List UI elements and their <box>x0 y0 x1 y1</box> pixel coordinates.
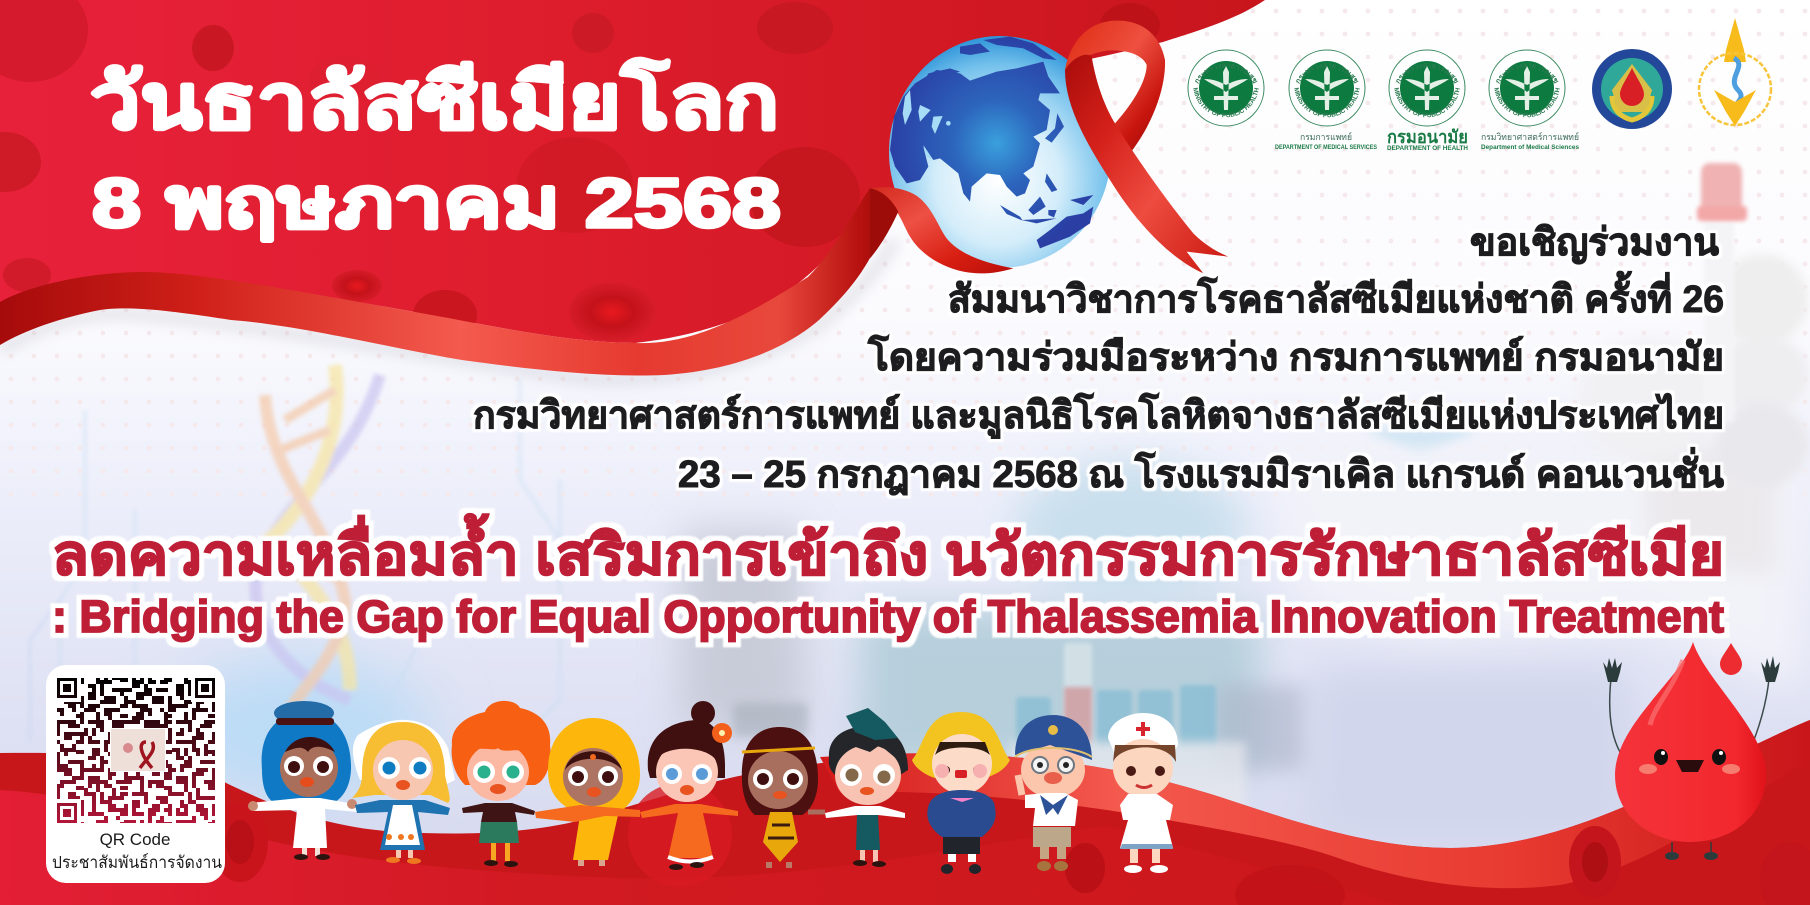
child: blue headdress <box>248 701 360 860</box>
red headline: ลดความเหลื่อมล้ำ เสริมการเข้าถึง นวัตกรรมการรักษาธาลัสซีเมีย <box>52 514 1724 586</box>
child: student with yellow hat <box>912 712 1010 874</box>
logo captions <box>1275 127 1579 152</box>
page title: 8 พฤษภาคม 2568 <box>92 164 781 242</box>
page title: วันธาลัสซีเมียโลก <box>90 57 779 145</box>
wave: front bright red <box>0 790 1400 905</box>
page title <box>90 57 781 242</box>
logo captions: DEPARTMENT OF HEALTH <box>1387 145 1468 152</box>
ribbon front strand and tail <box>1065 55 1228 273</box>
ribbon under globe <box>870 187 1013 273</box>
mascot face <box>1639 749 1740 774</box>
logo: department of health: MINISTRY OF PUBLIC HEALTH <box>1394 88 1460 118</box>
QR caption: ประชาสัมพันธ์การจัดงาน <box>52 853 222 872</box>
logo: department of medical sciences <box>1488 50 1566 126</box>
QR code card <box>46 665 225 883</box>
globe with world map <box>889 36 1111 268</box>
logo captions: Department of Medical Sciences <box>1481 144 1579 151</box>
logo: department of medical services <box>1288 50 1366 126</box>
logo: royal emblem <box>1699 18 1771 126</box>
ribbon back strand <box>1065 21 1165 153</box>
ribbon shadow <box>0 240 895 379</box>
QR caption <box>52 830 222 872</box>
invitation text block: กรมวิทยาศาสตร์การแพทย์ และมูลนิธิโรคโลหิตจางธาลัสซีเมียแห่งประเทศไทย <box>473 392 1724 439</box>
logo: department of medical sciences: กระทรวงสาธารณสุข <box>1496 63 1558 84</box>
swoosh ribbon <box>0 188 885 376</box>
logo captions: กรมการแพทย์ <box>1300 131 1352 142</box>
logo: ministry of public health: กระทรวงสาธารณสุข <box>1195 63 1258 84</box>
QR code <box>57 678 215 823</box>
wave: dark red band <box>0 720 1810 905</box>
blurred laboratory photo <box>170 163 1808 840</box>
invitation text block: โดยความร่วมมือระหว่าง กรมการแพทย์ กรมอนามัย <box>867 334 1724 379</box>
invitation text block <box>473 222 1724 496</box>
child: boy scout <box>1015 715 1092 871</box>
invitation text block: ขอเชิญร่วมงาน <box>1470 222 1719 264</box>
invitation text block: 23 – 25 กรกฎาคม 2568 ณ โรงแรมมิราเคิล แกรนด์ คอนเวนชั่น <box>678 447 1724 496</box>
partner logos <box>1188 18 1772 152</box>
logo: thalassemia foundation <box>1592 49 1672 129</box>
child: hat boy <box>825 708 908 867</box>
mascot hands <box>1603 656 1780 682</box>
blood cells on bottom wave <box>212 783 1810 905</box>
child: blonde dutch girl <box>352 720 455 864</box>
inland seas <box>903 90 951 160</box>
child: yellow sari <box>535 718 640 866</box>
children holding hands <box>248 701 1178 874</box>
logo captions: DEPARTMENT OF MEDICAL SERVICES <box>1275 144 1378 151</box>
top red shape <box>0 0 1265 343</box>
continents <box>890 37 1093 248</box>
child: nurse <box>1108 713 1178 873</box>
logo: ministry of public health: MINISTRY OF PUBLIC HEALTH <box>1193 88 1259 118</box>
logo: department of medical services: กระทรวงสาธารณสุข <box>1296 63 1358 84</box>
logo: department of health: กระทรวงสาธารณสุข <box>1396 63 1458 84</box>
logo: department of medical sciences: MINISTRY OF PUBLIC HEALTH <box>1494 88 1560 118</box>
logo: department of medical services: MINISTRY OF PUBLIC HEALTH <box>1294 88 1360 118</box>
red headline <box>52 514 1724 642</box>
QR caption: QR Code <box>100 830 170 849</box>
wave: salmon highlight ribbon <box>820 720 1810 888</box>
logo: department of health <box>1388 50 1466 126</box>
child: tribal girl <box>742 727 825 868</box>
invitation text block: สัมมนาวิชาการโรคธาลัสซีเมียแห่งชาติ ครั้งที่ 26 <box>948 271 1724 321</box>
red awareness ribbon <box>870 21 1228 273</box>
red blood cells on top shape <box>0 0 1160 341</box>
logo captions: กรมวิทยาศาสตร์การแพทย์ <box>1481 131 1579 142</box>
child: orange curly hair <box>452 701 550 867</box>
child: flower girl <box>640 701 738 870</box>
blood drop mascot <box>1603 642 1780 860</box>
DNA and circuit decoration <box>30 365 560 800</box>
logo: ministry of public health <box>1188 50 1264 126</box>
bottom red waves <box>0 720 1810 905</box>
red headline: : Bridging the Gap for Equal Opportunity of Thalassemia Innovation Treatment <box>52 591 1724 642</box>
logo captions: กรมอนามัย <box>1387 127 1468 147</box>
